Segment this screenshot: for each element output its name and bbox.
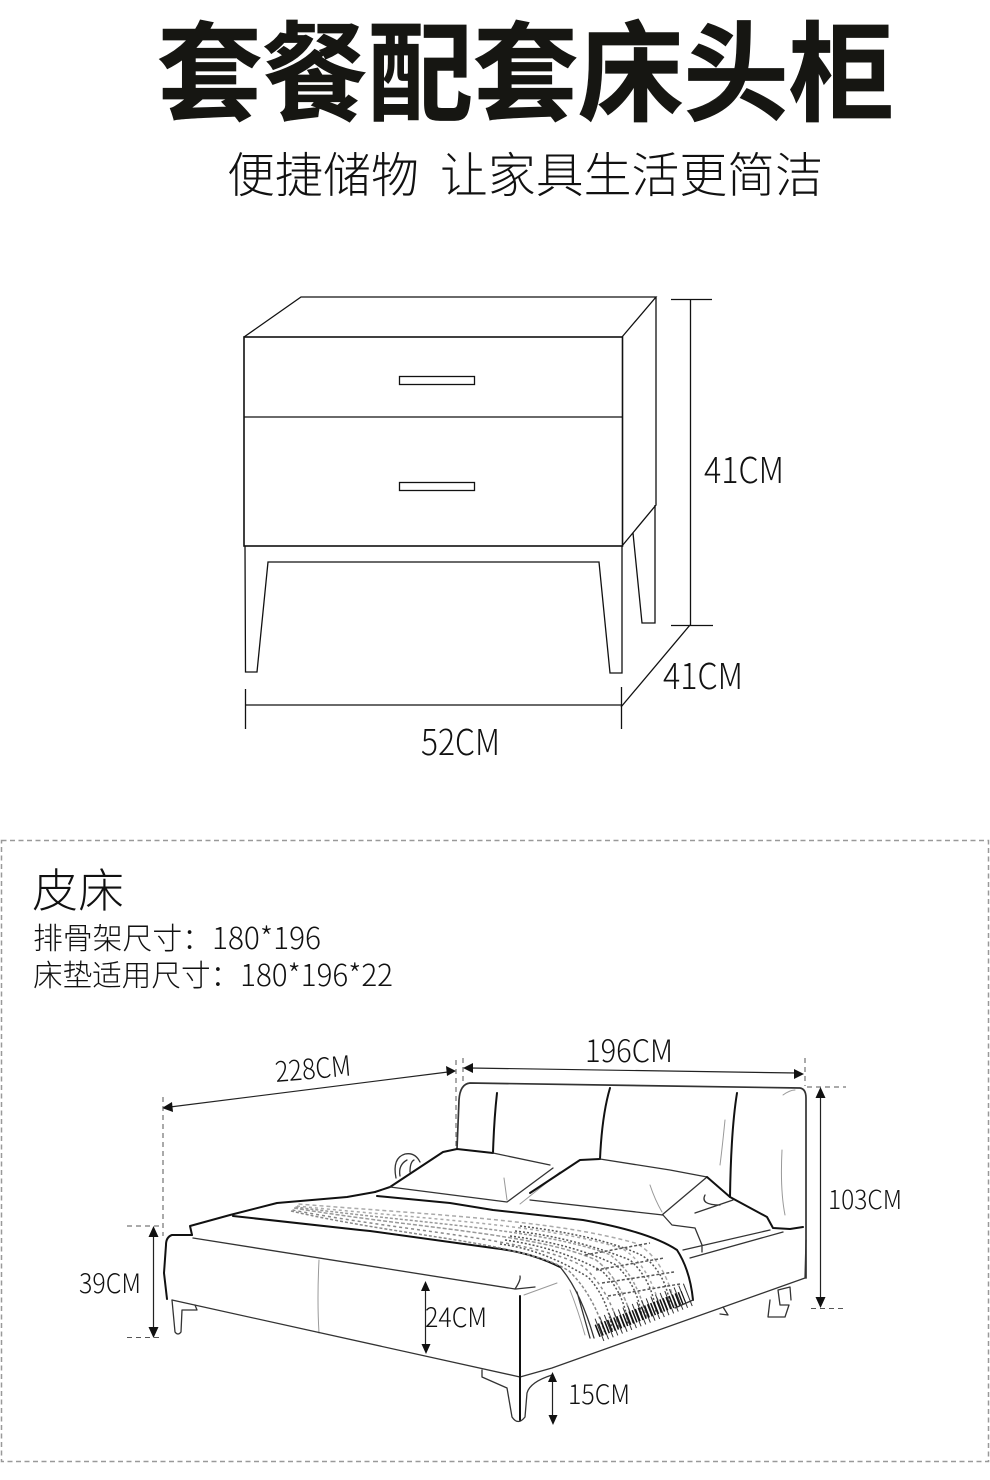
bed left leg xyxy=(172,1300,197,1334)
bed front panel xyxy=(164,1235,585,1377)
dimension 103CM xyxy=(807,1087,902,1308)
subtitle: 让家具生活更简洁 xyxy=(440,136,823,206)
blanket fringe xyxy=(560,1267,693,1338)
height dimension: 41CM: 41CM xyxy=(704,442,784,494)
nightstand line drawing xyxy=(244,297,656,673)
slat frame size: 排骨架尺寸：180*196 xyxy=(33,914,321,958)
subtitle xyxy=(227,136,823,206)
dimension 15CM: 15CM xyxy=(568,1373,630,1412)
dimension 196CM: 196CM xyxy=(585,1026,673,1071)
front legs xyxy=(245,546,622,673)
nightstand side face xyxy=(622,297,656,546)
panel: leather bed xyxy=(2,840,988,1462)
left side lamp cable xyxy=(395,1154,420,1178)
back leg xyxy=(633,505,655,623)
bed back legs xyxy=(720,1287,791,1317)
subtitle: 便捷储物 xyxy=(227,136,419,206)
drawer handle lower xyxy=(400,482,474,490)
depth dimension: 41CM: 41CM xyxy=(663,648,743,700)
blanket throw texture xyxy=(291,1204,680,1332)
bed front leg xyxy=(482,1370,552,1422)
width dimension: 52CM xyxy=(246,687,622,766)
dimension 103CM: 103CM xyxy=(828,1180,902,1217)
dimension 39CM: 39CM xyxy=(79,1262,141,1301)
headboard xyxy=(457,1083,806,1278)
dimension 196CM xyxy=(463,1026,805,1086)
bed line drawing xyxy=(164,1083,806,1422)
pillow left xyxy=(375,1149,560,1204)
nightstand front with drawers xyxy=(244,337,622,546)
nightstand top face xyxy=(244,297,656,337)
mattress top edge xyxy=(190,1192,783,1300)
dimension 228CM: 228CM xyxy=(273,1044,352,1091)
drawer handle upper xyxy=(400,376,474,384)
panel dashed border xyxy=(2,840,988,1462)
bed side base xyxy=(520,1240,806,1377)
width dimension: 52CM: 52CM xyxy=(421,714,500,766)
dimension 39CM xyxy=(79,1226,163,1338)
dimension 15CM xyxy=(548,1372,630,1425)
dimension 228CM xyxy=(162,1044,456,1236)
dimension 24CM: 24CM xyxy=(425,1296,487,1335)
mattress size: 床垫适用尺寸：180*196*22 xyxy=(33,951,393,995)
height dimension: 41CM xyxy=(671,300,784,626)
depth dimension: 41CM xyxy=(621,625,743,707)
pillow right xyxy=(530,1159,803,1245)
dimension 24CM xyxy=(421,1281,487,1354)
bed heading: 皮床 xyxy=(32,855,124,921)
